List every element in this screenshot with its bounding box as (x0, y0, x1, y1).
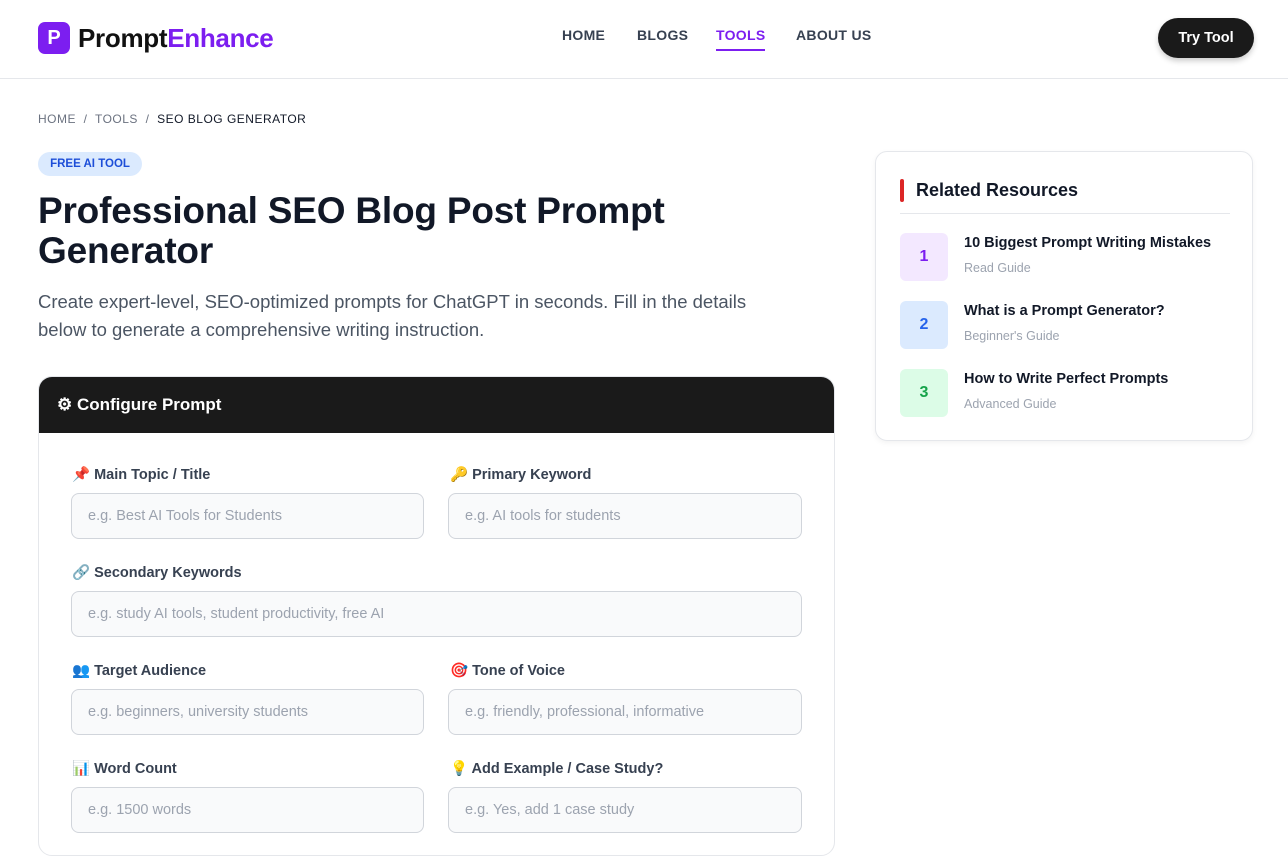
form fields: 🔑 Primary Keyword (450, 467, 591, 483)
form fields: e.g. friendly, professional, informative (465, 704, 704, 720)
title: Professional SEO Blog Post Prompt Generator (38, 190, 665, 271)
resource 2: Beginner's Guide (964, 329, 1060, 343)
resource 3: How to Write Perfect Prompts (964, 371, 1168, 387)
resource 1: Read Guide (964, 261, 1031, 275)
form fields: 📌 Main Topic / Title (72, 467, 210, 483)
resource 3 (900, 369, 1168, 417)
header: HOME (562, 27, 605, 43)
resource 3: 3 (920, 384, 928, 401)
resource 1 (900, 233, 1211, 281)
resource 2 (900, 301, 1165, 349)
resource 2: What is a Prompt Generator? (964, 303, 1165, 319)
button: try tool: Try Tool (1178, 30, 1234, 46)
header: BLOGS (637, 27, 688, 43)
form fields: e.g. study AI tools, student productivity, free AI (88, 606, 384, 622)
form fields: e.g. Best AI Tools for Students (88, 508, 282, 524)
header (0, 0, 1288, 79)
panel: configure prompt (38, 376, 835, 856)
header: ABOUT US (796, 27, 872, 43)
resources heading: Related Resources (916, 180, 1078, 200)
badge: FREE AI TOOL (50, 158, 130, 170)
panel: related resources (875, 151, 1253, 441)
resource 1: 1 (920, 248, 928, 265)
header: TOOLS (716, 27, 765, 43)
form fields: 🔗 Secondary Keywords (72, 565, 242, 581)
form fields: 👥 Target Audience (72, 663, 206, 679)
navigation (562, 27, 872, 51)
logo: PromptEnhance (78, 23, 273, 53)
form fields: e.g. Yes, add 1 case study (465, 802, 634, 818)
form fields: 🎯 Tone of Voice (450, 663, 565, 679)
resource 3: Advanced Guide (964, 397, 1056, 411)
resources heading (900, 179, 1230, 214)
form fields: 📊 Word Count (72, 761, 177, 777)
panel header (39, 377, 836, 433)
badge (38, 152, 142, 176)
resource 1: 10 Biggest Prompt Writing Mistakes (964, 235, 1211, 251)
resource 2: 2 (920, 316, 928, 333)
form fields: e.g. AI tools for students (465, 508, 621, 524)
breadcrumb: HOME / TOOLS / SEO BLOG GENERATOR (38, 112, 306, 126)
logo: P (47, 27, 61, 49)
form fields: e.g. beginners, university students (88, 704, 308, 720)
panel header: ⚙ Configure Prompt (57, 395, 221, 414)
form fields: e.g. 1500 words (88, 802, 191, 818)
form fields: 💡 Add Example / Case Study? (450, 761, 663, 777)
description: Create expert-level, SEO-optimized prompts for ChatGPT in seconds. Fill in the details below to generate a comprehensive writing instruction. (38, 291, 746, 340)
button: try tool (1158, 18, 1254, 58)
